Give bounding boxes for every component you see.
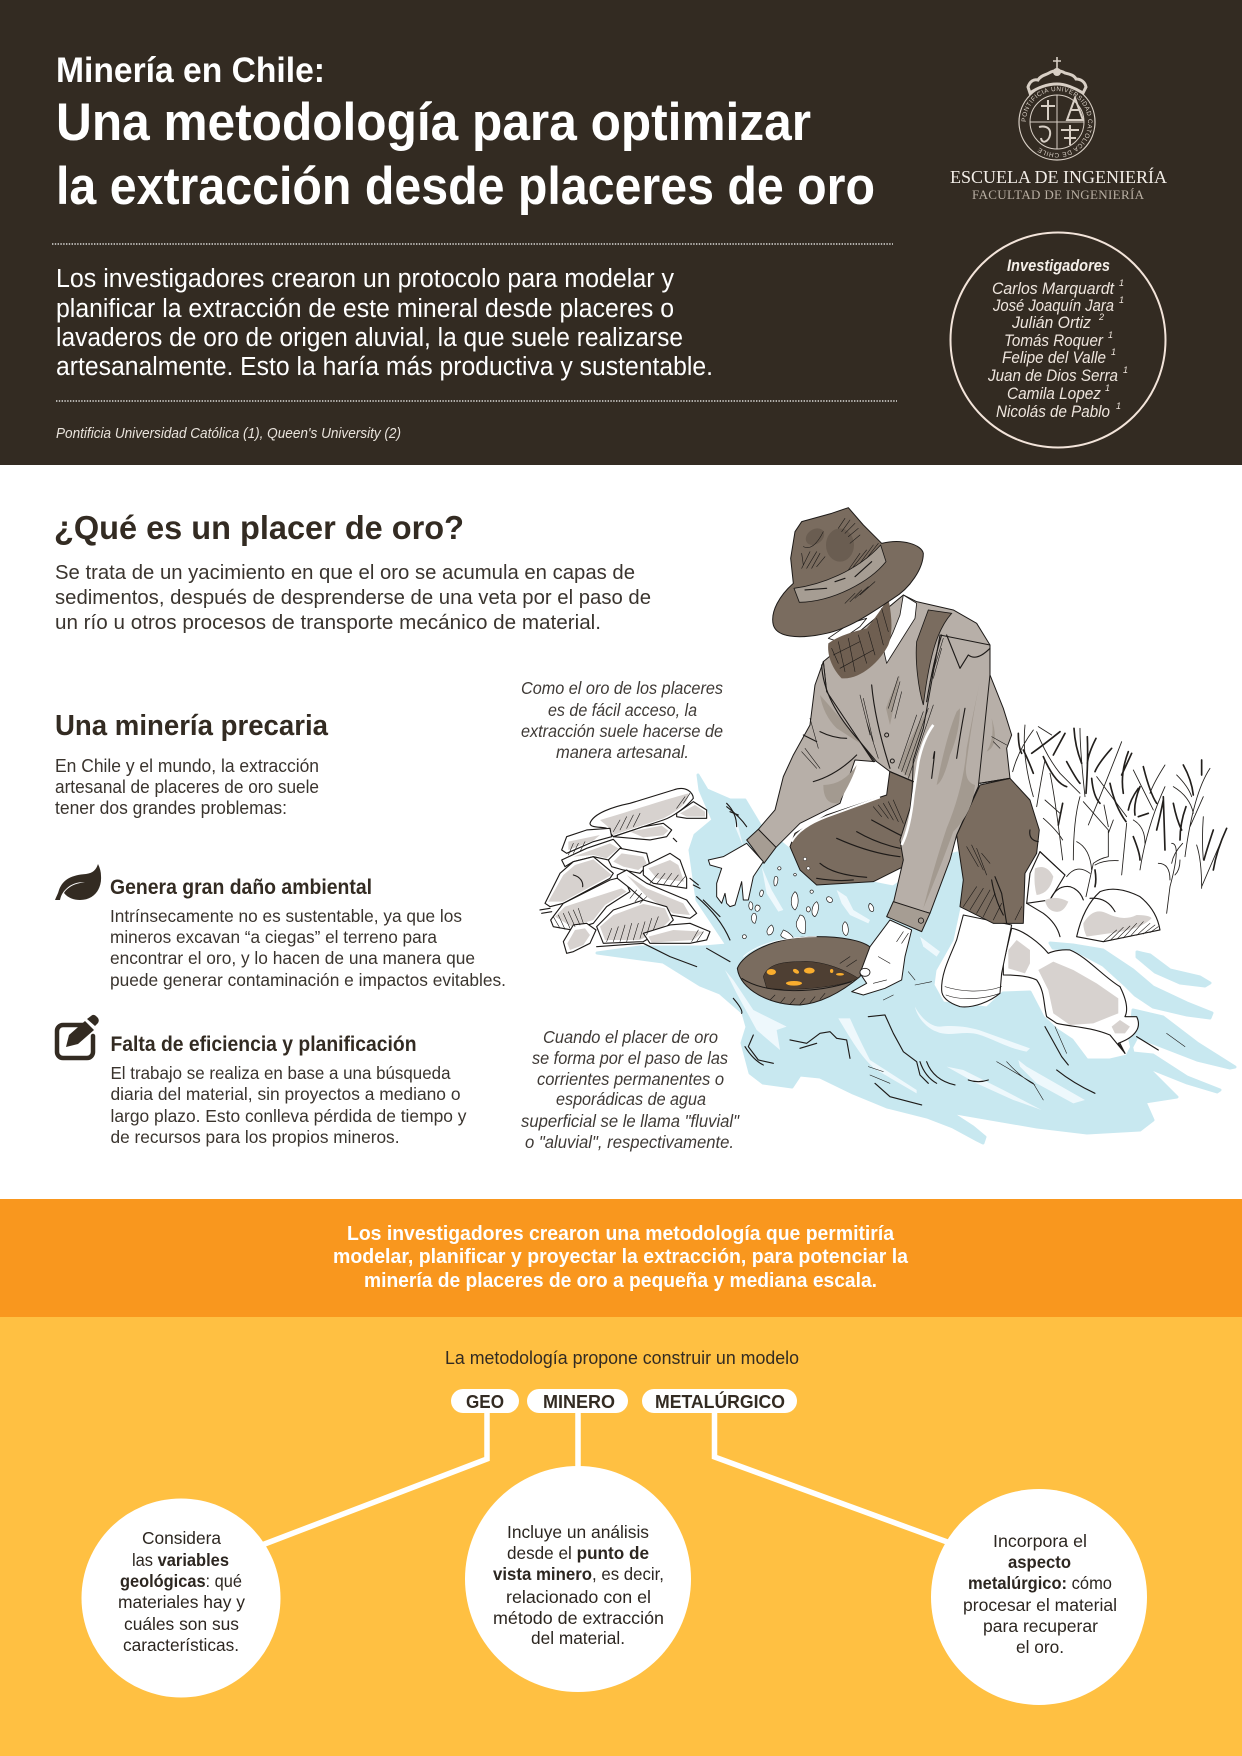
researchers circle: 1 [1119,295,1124,305]
droplets [742,867,874,939]
panel: orange conclusion band [0,1199,1242,1317]
problem: lack of efficiency: Falta de eficiencia y planificación [110,1033,416,1056]
text block: problems intro: tener dos grandes problemas: [55,798,287,818]
caption: fluvial: Cuando el placer de oro [543,1027,718,1047]
circle: geo: características. [123,1635,239,1655]
caption: easy access: manera artesanal. [556,742,689,762]
circle: minero: relacionado con el [506,1587,651,1607]
circle: minero: desde el punto de [507,1543,649,1563]
logo: school name [950,166,1167,202]
problem: environmental damage: mineros excavan “a ciegas” el terreno para [110,927,437,947]
text block: definition: Se trata de un yacimiento en que el oro se acumula en capas de [55,561,635,584]
intro text: planificar la extracción de este mineral desde placeres o [56,295,674,323]
icon: leaf [55,864,101,900]
pants [790,770,1039,923]
circle: metalurgico: para recuperar [983,1616,1098,1636]
pill: minero [527,1389,628,1413]
problem: environmental damage: Genera gran daño ambiental [110,876,372,899]
problem: lack of efficiency [57,1015,467,1147]
circle: minero: vista minero, es decir, [493,1564,664,1584]
circle: geo [82,1498,280,1698]
logo: crest [1018,57,1096,161]
gold pan [737,937,872,1005]
circle: geo: cuáles son sus [124,1614,239,1634]
circle: metalurgico: metalúrgico: cómo [968,1573,1112,1593]
boot [942,915,1012,1007]
intro text: artesanalmente. Esto la haría más productiva y sustentable. [56,353,713,381]
problem: environmental damage [55,864,506,990]
intro text: lavaderos de oro de origen aluvial, la que suele realizarse [56,324,683,352]
rock lower right [725,928,1138,1053]
water ripples [733,972,1185,1105]
connector lines [262,1410,950,1545]
circle: metalurgico [931,1489,1147,1705]
circle: minero: Incluye un análisis [507,1522,649,1542]
intro text: Los investigadores crearon un protocolo para modelar y [56,265,674,293]
researchers circle: José Joaquín Jara [992,297,1114,315]
icon: pencil on square [57,1015,99,1058]
text block: definition [55,561,651,634]
problem: lack of efficiency: El trabajo se realiza en base a una búsqueda [110,1063,451,1083]
illustration: gold panner [540,508,1235,1143]
folds and hatching [803,635,1010,783]
problem: lack of efficiency: diaria del material, sin proyectos a mediano o [110,1084,460,1104]
circle: metalurgico: procesar el material [963,1595,1117,1615]
suspender [916,610,952,705]
problem: lack of efficiency: largo plazo. Esto conlleva pérdida de tiempo y [110,1106,467,1126]
logo: school name: ESCUELA DE INGENIERÍA [950,166,1167,187]
panel: header [0,0,1242,465]
circle: metalurgico: Incorpora el [993,1531,1087,1551]
problem: environmental damage: Intrínsecamente no es sustentable, ya que los [110,906,462,926]
researchers circle: 1 [1111,347,1116,357]
pill: geo: GEO [466,1392,504,1412]
title: Una metodología para optimizar [56,93,811,152]
title [56,51,875,216]
pill: metalurgico: METALÚRGICO [655,1391,785,1412]
hands and pan [708,807,912,1005]
circle: geo: geológicas: qué [120,1571,242,1591]
methodology intro: La metodología propone construir un modelo [445,1348,799,1368]
left arm [758,662,875,847]
water highlights [725,937,1085,1110]
problem: environmental damage: encontrar el oro, y lo hacen de una manera que [110,948,475,968]
text block: problems intro: artesanal de placeres de oro suele [55,777,319,797]
researchers circle: Juan de Dios Serra [987,367,1118,385]
heading: que es un placer de oro: ¿Qué es un placer de oro? [54,509,464,546]
pill: geo [451,1389,519,1413]
circle: minero: método de extracción [493,1608,664,1628]
circle: geo: las variables [132,1550,229,1570]
caption: fluvial: se forma por el paso de las [532,1048,728,1068]
circle: metalurgico: el oro. [1016,1637,1064,1657]
researchers circle: 1 [1123,365,1128,375]
researchers circle: 1 [1108,330,1113,340]
title: la extracción desde placeres de oro [56,157,875,216]
caption: easy access: es de fácil acceso, la [548,700,697,720]
man upper body [747,508,1012,932]
researchers circle: Tomás Roquer [1004,332,1104,350]
shirt torso [823,595,1012,783]
rocks left [540,788,737,967]
circle: minero [465,1466,691,1692]
researchers circle: Carlos Marquardt [992,280,1115,298]
text block: problems intro [55,756,319,818]
left hand [708,843,763,907]
intro text [56,265,713,381]
researchers circle: 2 [1098,312,1104,322]
caption: easy access: Como el oro de los placeres [521,678,723,698]
circle: metalurgico: aspecto [1008,1552,1071,1572]
panel: methodology [0,1317,1242,1756]
logo: crest: PONTIFICIA UNIVERSIDAD CATOLICA DE CHILE [1022,86,1092,158]
caption: fluvial [521,1027,740,1152]
researchers circle: 1 [1116,401,1121,411]
caption: fluvial: superficial se le llama "fluvial" [521,1111,740,1131]
researchers circle: Nicolás de Pablo [996,403,1110,421]
problem: environmental damage: puede generar contaminación e impactos evitables. [110,970,506,990]
caption: fluvial: o "aluvial", respectivamente. [525,1132,734,1152]
researchers circle: Felipe del Valle [1002,349,1106,367]
researchers circle [950,232,1166,448]
title: Minería en Chile: [56,51,325,90]
panel: orange conclusion band: minería de placeres de oro a pequeña y mediana escala. [364,1269,877,1292]
beard [828,598,891,678]
knee and cuff details [727,807,747,827]
researchers circle: Julián Ortiz [1011,314,1092,332]
circle: minero: del material. [531,1628,625,1648]
text block: problems intro: En Chile y el mundo, la extracción [55,756,319,776]
heading: una mineria precaria: Una minería precaria [55,710,329,742]
caption: easy access [521,678,723,762]
researchers circle: Investigadores [1007,257,1110,275]
logo: school name: FACULTAD DE INGENIERÍA [972,187,1145,202]
text block: definition: sedimentos, después de desprenderse de una veta por el paso de [55,586,651,609]
right hand [852,920,912,995]
panel: orange conclusion band: modelar, planificar y proyectar la extracción, para potenciar la [333,1245,909,1268]
caption: fluvial: corrientes permanentes o [537,1069,724,1089]
text block: definition: un río u otros procesos de transporte mecánico de material. [55,611,601,634]
caption: easy access: extracción suele hacerse de [521,721,723,741]
reeds [1013,725,1227,913]
researchers circle: 1 [1119,278,1124,288]
rocks right [1027,852,1160,942]
hat [773,508,923,637]
researchers circle: Camila Lopez [1007,385,1102,403]
right arm [893,635,990,913]
caption: fluvial: esporádicas de agua [556,1089,706,1109]
pill: minero: MINERO [543,1392,615,1412]
problem: lack of efficiency: de recursos para los propios mineros. [110,1127,400,1147]
collar [828,595,917,663]
affiliations: Pontificia Universidad Católica (1), Queen's University (2) [56,425,401,442]
panel: orange conclusion band: Los investigadores crearon una metodología que permitiría [347,1222,895,1245]
water [597,775,1235,1143]
researchers circle: 1 [1105,383,1110,393]
circle: geo: materiales hay y [118,1592,245,1612]
circle: geo: Considera [142,1528,221,1548]
